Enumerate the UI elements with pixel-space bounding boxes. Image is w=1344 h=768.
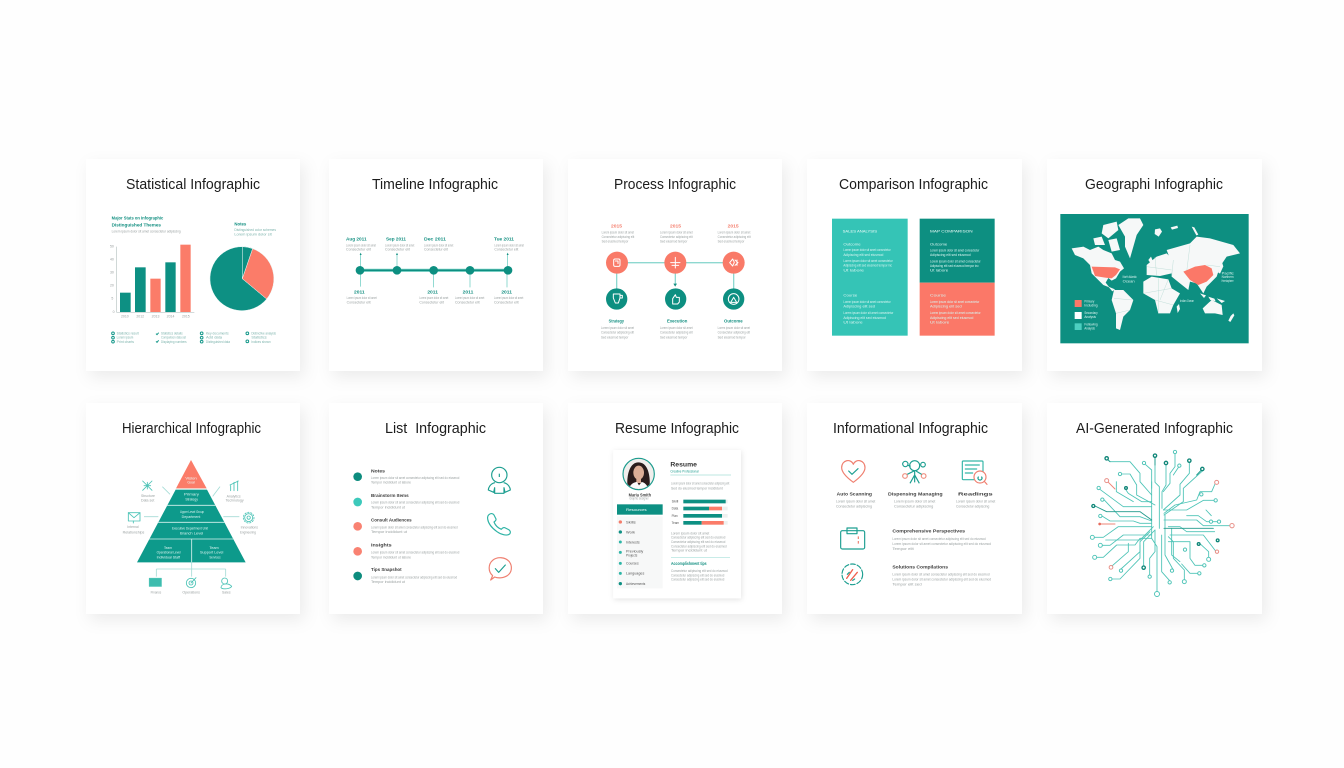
sidebar menu: Achievements (626, 582, 646, 586)
process flow: Outcome (724, 319, 743, 324)
icon: chat check (489, 558, 511, 580)
comparison columns: Course (930, 293, 946, 297)
process flow: Sed eiusmod tempor (602, 239, 629, 243)
bar chart: 0 (113, 310, 115, 314)
process flow: Sed eiusmod tempor (660, 239, 688, 243)
timeline chart: Consectetur elit (419, 300, 444, 304)
legend: Distinctive analysis (251, 331, 276, 335)
text block: comprehensive: Lorem ipsum dolor sit amet consectetur adipiscing elit sed do eiusmod (892, 537, 986, 541)
icon: gear tools (842, 564, 863, 585)
panel: process infographic (568, 159, 782, 371)
process flow: Lorem ipsum dolor sit amet (718, 231, 750, 235)
list items: Tempor incididunt ut labore (371, 555, 411, 559)
card grid (86, 159, 1262, 614)
pyramid diagram: Upper Level Group (180, 510, 204, 514)
map labels: North Atlantic (1123, 275, 1137, 279)
sidebar menu: Languages (626, 572, 645, 576)
map legend: Analysis (1084, 326, 1095, 330)
timeline chart: Lorem ipsum dolor sit amet (419, 296, 448, 300)
list items: Tempor incididunt ut (371, 580, 405, 584)
skill bars (683, 500, 728, 525)
map legend: Analysis (1084, 315, 1096, 319)
side labels: Operations (182, 591, 200, 595)
bar chart: 50 (110, 245, 114, 249)
timeline chart: 2011 (354, 289, 365, 294)
pyramid diagram: Team (209, 546, 219, 550)
panel: hierarchical infographic (86, 403, 300, 614)
comparison columns: Ut labore (843, 321, 863, 325)
pyramid diagram: Goal (187, 480, 195, 485)
list items: Tempor incididunt ut (371, 505, 405, 509)
text block: comprehensive: Comprehensive Perspectives (892, 528, 966, 533)
comparison columns: Adipiscing elit sed eiusmod (843, 253, 883, 257)
comparison columns: Outcome (930, 242, 947, 246)
map labels (1123, 272, 1234, 303)
coral traces (1100, 482, 1115, 524)
comparison columns: Lorem ipsum dolor sit amet consectetur (930, 248, 980, 252)
timeline chart: 2011 (427, 289, 439, 294)
resume text: Consectetur adipiscing elit sed do eiusmod (671, 540, 725, 544)
timeline chart: Consectetur elit (494, 300, 519, 304)
process flow: 2015 (728, 224, 739, 229)
process flow: Lorem ipsum dolor sit amet (660, 326, 693, 330)
list items: Lorem ipsum dolor sit amet consectetur adipiscing elit sed do eiusmod (371, 476, 459, 480)
legend: Print charts (117, 340, 134, 344)
informational content (836, 461, 995, 586)
comparison columns: Ut labore (843, 268, 864, 272)
resume body: Lorem ipsum dolor sit amet consectetur adipiscing elit (671, 482, 729, 486)
text block: comprehensive: Tempor elit (892, 547, 914, 551)
highlighted traces (1095, 456, 1213, 528)
resume text: Consectetur adipiscing elit sed do eiusmod (671, 544, 727, 548)
side labels: Analytics (227, 494, 241, 498)
icon labels (836, 491, 995, 508)
legend: Statistics details (161, 331, 183, 335)
list items: Tempor incididunt ut labore (371, 481, 411, 485)
resume sheet: Maria Smith (629, 492, 651, 497)
panel: geographic infographic (1047, 159, 1262, 371)
timeline chart: Lorem ipsum dolor sit amet (494, 296, 523, 300)
icon labels: Auto Scanning (837, 491, 872, 496)
side labels (123, 494, 258, 595)
comparison columns: Ut labore (930, 269, 948, 273)
timeline chart: Consectetur elit (494, 247, 518, 251)
process flow: Consectetur adipiscing elit (718, 331, 750, 335)
map legend: Secondary (1084, 311, 1098, 315)
icon labels: Consectetur adipiscing (836, 504, 872, 508)
sidebar menu: Courses (626, 562, 639, 566)
bar chart: 2015 (182, 314, 190, 318)
legend: Statistics result (117, 331, 139, 335)
sidebar menu: Work (626, 530, 635, 534)
icon labels: Lorem ipsum dolor sit amet (894, 500, 935, 504)
bar chart: 40 (110, 258, 114, 262)
bar chart: 30 (110, 271, 114, 275)
comparison columns: Lorem ipsum dolor sit amet consectetur (930, 311, 981, 315)
heading: geographic: Geographi Infographic (1085, 176, 1223, 193)
pyramid diagram: Executive Department Unit (172, 527, 208, 531)
timeline chart: Lorem ipsum dolor sit amet (424, 243, 453, 247)
pyramid diagram: Individual Staff (157, 555, 180, 559)
map labels: Northern (1222, 275, 1234, 279)
resume body: Team (672, 521, 679, 525)
process flow: Sed eiusmod tempor (601, 335, 629, 339)
circuit brain (1090, 450, 1234, 596)
list items: Lorem ipsum dolor sit amet consectetur adipiscing elit sed do eiusmod (371, 501, 459, 505)
list items: Notes (371, 468, 386, 473)
process flow: Strategy (609, 319, 625, 324)
continents (1072, 218, 1240, 330)
list items (353, 467, 511, 584)
text block: synthesis (892, 564, 991, 586)
text block: synthesis: Lorem ipsum dolor sit amet consectetur adipiscing elit sed do eiusmod (892, 577, 991, 581)
side labels: Internal (127, 525, 139, 529)
timeline chart: Consectetur elit (385, 247, 410, 251)
list items: Consult Audiences (371, 518, 412, 523)
legend (112, 331, 276, 344)
resume text: Accomplishment tips (671, 561, 707, 566)
side icons (128, 481, 254, 589)
process flow: Sed eiusmod tempor (718, 239, 745, 243)
resume text: Consectetur adipiscing elit sed do eiusmod (671, 573, 724, 577)
comparison columns: Adipiscing elit sed eiusmod tempor inc (930, 264, 979, 268)
bar chart: 20 (110, 284, 114, 288)
resume body: Resume (670, 462, 697, 469)
process flow: Sed eiusmod tempor (718, 335, 746, 339)
legend: Key documents (206, 331, 229, 335)
circuit traces (1094, 454, 1230, 592)
panel: resume infographic (568, 403, 782, 614)
process flow: Consectetur adipiscing elit (660, 235, 693, 239)
legend: Distinguished data (206, 340, 230, 344)
timeline chart: Lorem ipsum dolor sit amet (385, 243, 414, 247)
timeline chart: Tue 2011 (494, 237, 515, 242)
pie note: Lorem ipsum dolor sit (234, 232, 272, 236)
resume text: Consectetur adipiscing elit sed do eiusmod (671, 569, 728, 573)
comparison columns (832, 219, 995, 336)
sidebar menu: Projects (626, 553, 638, 557)
pyramid diagram: Department (182, 515, 200, 519)
list items: Insights (371, 543, 392, 548)
sidebar menu: Interests (626, 540, 640, 544)
process flow: Lorem ipsum dolor sit amet (601, 326, 634, 330)
side labels: Technology (226, 499, 244, 503)
process flow: 2015 (611, 224, 623, 229)
portrait (623, 458, 654, 492)
comparison columns: Adipiscing elit sed (843, 305, 875, 309)
timeline chart: Consectetur elit (424, 247, 448, 251)
pyramid diagram: Vision (185, 475, 197, 480)
bar chart: 2014 (167, 314, 174, 318)
legend: Indices shown (251, 340, 271, 344)
icon: heart check (842, 461, 865, 482)
icon labels: Consectetur adipiscing (956, 504, 989, 508)
bar chart: 2010 (121, 314, 129, 318)
list items: Lorem ipsum dolor sit amet consectetur adipiscing elit sed do eiusmod (371, 575, 457, 579)
heading: resume: Resume Infographic (615, 420, 739, 437)
timeline chart: Aug 2011 (346, 237, 367, 242)
resume text (671, 532, 728, 582)
icon: document search (962, 461, 987, 484)
comparison columns: Ut labore (930, 321, 949, 325)
resume text: Consectetur adipiscing elit sed do eiusmod (671, 536, 725, 540)
side labels: Structure (141, 494, 155, 498)
pie chart (210, 247, 274, 311)
panel: ai-generated infographic (1047, 403, 1262, 614)
heading: timeline: Timeline Infographic (372, 176, 498, 193)
map legend: Primary (1084, 299, 1095, 303)
legend: Comparison data set (161, 336, 186, 340)
resume body: Creative Professional (670, 469, 699, 473)
highlighted regions (1092, 265, 1213, 285)
comparison columns: Adipiscing elit sed eiusmod (843, 316, 886, 320)
side labels: Finance (151, 591, 161, 595)
resume sheet: Graphic designer (629, 497, 649, 501)
map legend: Following (1084, 322, 1098, 326)
resume body: Plan (672, 514, 678, 518)
process flow: 2015 (670, 224, 682, 229)
timeline chart: Sep 2011 (386, 237, 407, 242)
chart heading (112, 216, 181, 234)
bar chart: 2013 (152, 314, 159, 318)
process flow: Consectetur adipiscing elit (601, 331, 634, 335)
timeline chart: Dec 2011 (424, 237, 447, 242)
timeline chart: Lorem ipsum dolor sit amet (494, 243, 524, 247)
comparison columns: Outcome (843, 242, 861, 246)
chart heading: Major Stats on Infographic (112, 216, 164, 221)
pie note: Notes (234, 222, 247, 227)
legend: Displaying numbers (161, 340, 187, 344)
side labels: Innovations (241, 526, 258, 530)
bar chart: 2012 (136, 314, 144, 318)
chart heading: Distinguished Themes (112, 223, 162, 228)
text block: synthesis: Tempor elit sed (892, 582, 922, 586)
country borders (1114, 245, 1220, 313)
circuit nodes (1090, 450, 1234, 596)
legend: Statistics (251, 336, 267, 340)
icon labels: Dispensing Managing (888, 491, 943, 496)
legend: Lorem ipsum (117, 336, 133, 340)
text block: synthesis: Lorem ipsum dolor sit amet consectetur adipiscing elit sed do eiusmod (892, 573, 990, 577)
pyramid diagram: Primary (184, 493, 199, 497)
comparison columns: MAP COMPARISON (930, 228, 973, 233)
bar chart: 5 (111, 297, 113, 301)
comparison columns: Lorem ipsum dolor sit amet consectetur (843, 248, 891, 252)
icon: network (903, 461, 926, 483)
icon labels: Readings (958, 491, 994, 496)
legend: Add data (206, 336, 222, 340)
side labels: Engineering (240, 530, 256, 534)
comparison columns: Lorem ipsum dolor sit amet consectetur (930, 300, 980, 304)
list items: Lorem ipsum dolor sit amet consectetur adipiscing elit sed do eiusmod (371, 550, 459, 554)
comparison columns: Adipiscing elit sed (930, 305, 962, 309)
icon labels: Lorem ipsum dolor sit amet (836, 500, 875, 504)
timeline chart: Lorem ipsum dolor sit amet (347, 296, 377, 300)
chart heading: Lorem ipsum dolor sit amet consectetur adipiscing (112, 230, 181, 234)
sidebar menu: Previously (626, 549, 644, 553)
resume text: Consectetur adipiscing elit sed do eiusmod (671, 578, 724, 582)
heading: list: List Infographic (385, 420, 486, 437)
process flow (601, 224, 751, 339)
side labels: Data set (141, 498, 154, 502)
process flow: Lorem ipsum dolor sit amet (602, 231, 634, 235)
sidebar menu: Resources (626, 507, 647, 512)
pyramid diagram: Strategy (185, 498, 198, 502)
timeline chart: 2011 (501, 289, 513, 294)
comparison columns: Adipiscing elit sed eiusmod tempor inc (843, 264, 892, 268)
sidebar menu (617, 504, 663, 588)
panel: list infographic (329, 403, 543, 614)
icon: phone (488, 514, 510, 535)
resume body (670, 462, 731, 558)
comparison columns: SALES ANALYSIS (843, 228, 877, 233)
timeline chart: Consectetur elit (346, 247, 371, 251)
timeline chart: Consectetur elit (455, 300, 480, 304)
infographic gallery (92, 168, 1267, 621)
text block: comprehensive (892, 528, 991, 551)
process flow: Consectetur adipiscing elit (660, 331, 693, 335)
statistical content (110, 216, 276, 344)
list items: Brainstorm Items (371, 493, 409, 498)
pie note: Distinguished color schemes (234, 228, 276, 232)
timeline chart: Lorem ipsum dolor sit amet (455, 296, 484, 300)
world map (1060, 214, 1249, 343)
heading: hierarchical: Hierarchical Infographic (122, 420, 261, 437)
comparison columns: Course (843, 293, 857, 297)
panel: statistical infographic (86, 159, 300, 371)
text block: synthesis: Solutions Compilations (892, 564, 949, 569)
pyramid diagram: Team (164, 546, 172, 550)
comparison columns: Lorem ipsum dolor sit amet consectetur (843, 300, 891, 304)
heading: process: Process Infographic (614, 176, 736, 193)
pyramid diagram: Services (209, 555, 221, 559)
map labels: Pacific (1222, 272, 1234, 276)
resume text: Lorem ipsum dolor sit amet (671, 532, 709, 536)
timeline chart: 2011 (463, 289, 474, 294)
side labels: Relationships (123, 530, 145, 534)
sidebar menu: Skills (626, 520, 636, 524)
heading: informational: Informational Infographic (833, 420, 988, 437)
pyramid diagram (123, 460, 258, 595)
text block: comprehensive: Lorem ipsum dolor sit amet consectetur adipiscing elit sed do eiusmod (892, 542, 991, 546)
resume sheet (613, 450, 741, 598)
process flow: Consectetur adipiscing elit (718, 235, 751, 239)
process icons (613, 257, 739, 304)
side labels: Sales (222, 591, 231, 595)
map labels: Hemisphere (1222, 279, 1234, 283)
list items: Tempor incididunt ut (371, 530, 407, 534)
list items: Lorem ipsum dolor sit amet consectetur adipiscing elit sed do eiusmod (371, 526, 458, 530)
heading: statistical: Statistical Infographic (126, 176, 260, 193)
pyramid diagram: Branch Level (180, 532, 204, 536)
resume body: Skill (672, 500, 679, 504)
list items: Tips Snapshot (371, 567, 402, 572)
icon labels: Lorem ipsum dolor sit amet (956, 500, 995, 504)
panel: comparison infographic (807, 159, 1022, 371)
resume body: Data (672, 507, 678, 511)
map labels: Indian Ocean (1180, 299, 1194, 303)
map labels: Ocean (1123, 279, 1135, 283)
map legend (1075, 299, 1098, 330)
process flow: Lorem ipsum dolor sit amet (660, 231, 693, 235)
icon: person (488, 467, 510, 493)
comparison columns: Adipiscing elit sed eiusmod (930, 316, 973, 320)
resume body: Sed do eiusmod tempor incididunt (671, 487, 723, 491)
panel: timeline infographic (329, 159, 543, 371)
comparison columns: Lorem ipsum dolor sit amet consectetur (930, 259, 981, 263)
bar chart (110, 245, 194, 318)
comparison columns: Lorem ipsum dolor sit amet consectetur (843, 259, 893, 263)
timeline chart: Consectetur elit (347, 300, 371, 304)
map legend: Including (1084, 303, 1098, 307)
panel: informational infographic (807, 403, 1022, 614)
pyramid diagram: Operational Level (157, 551, 181, 555)
process flow: Lorem ipsum dolor sit amet (718, 326, 750, 330)
pyramid diagram: Support Level (200, 551, 224, 555)
comparison columns: Adipiscing elit sed eiusmod (930, 253, 971, 257)
timeline chart: Lorem ipsum dolor sit amet (346, 243, 376, 247)
pie note (234, 222, 276, 236)
process flow: Consectetur adipiscing elit (602, 235, 634, 239)
timeline chart (346, 237, 524, 304)
comparison columns: Lorem ipsum dolor sit amet consectetur (843, 311, 894, 315)
heading: ai-generated: AI-Generated Infographic (1076, 420, 1233, 437)
process flow: Sed eiusmod tempor (660, 335, 688, 339)
heading: comparison: Comparison Infographic (839, 176, 988, 193)
icon: clipboard case (841, 528, 865, 549)
icon labels: Consectetur adipiscing (894, 504, 933, 508)
process flow: Execution (667, 319, 688, 324)
resume text: Tempor incididunt ut (671, 549, 707, 553)
